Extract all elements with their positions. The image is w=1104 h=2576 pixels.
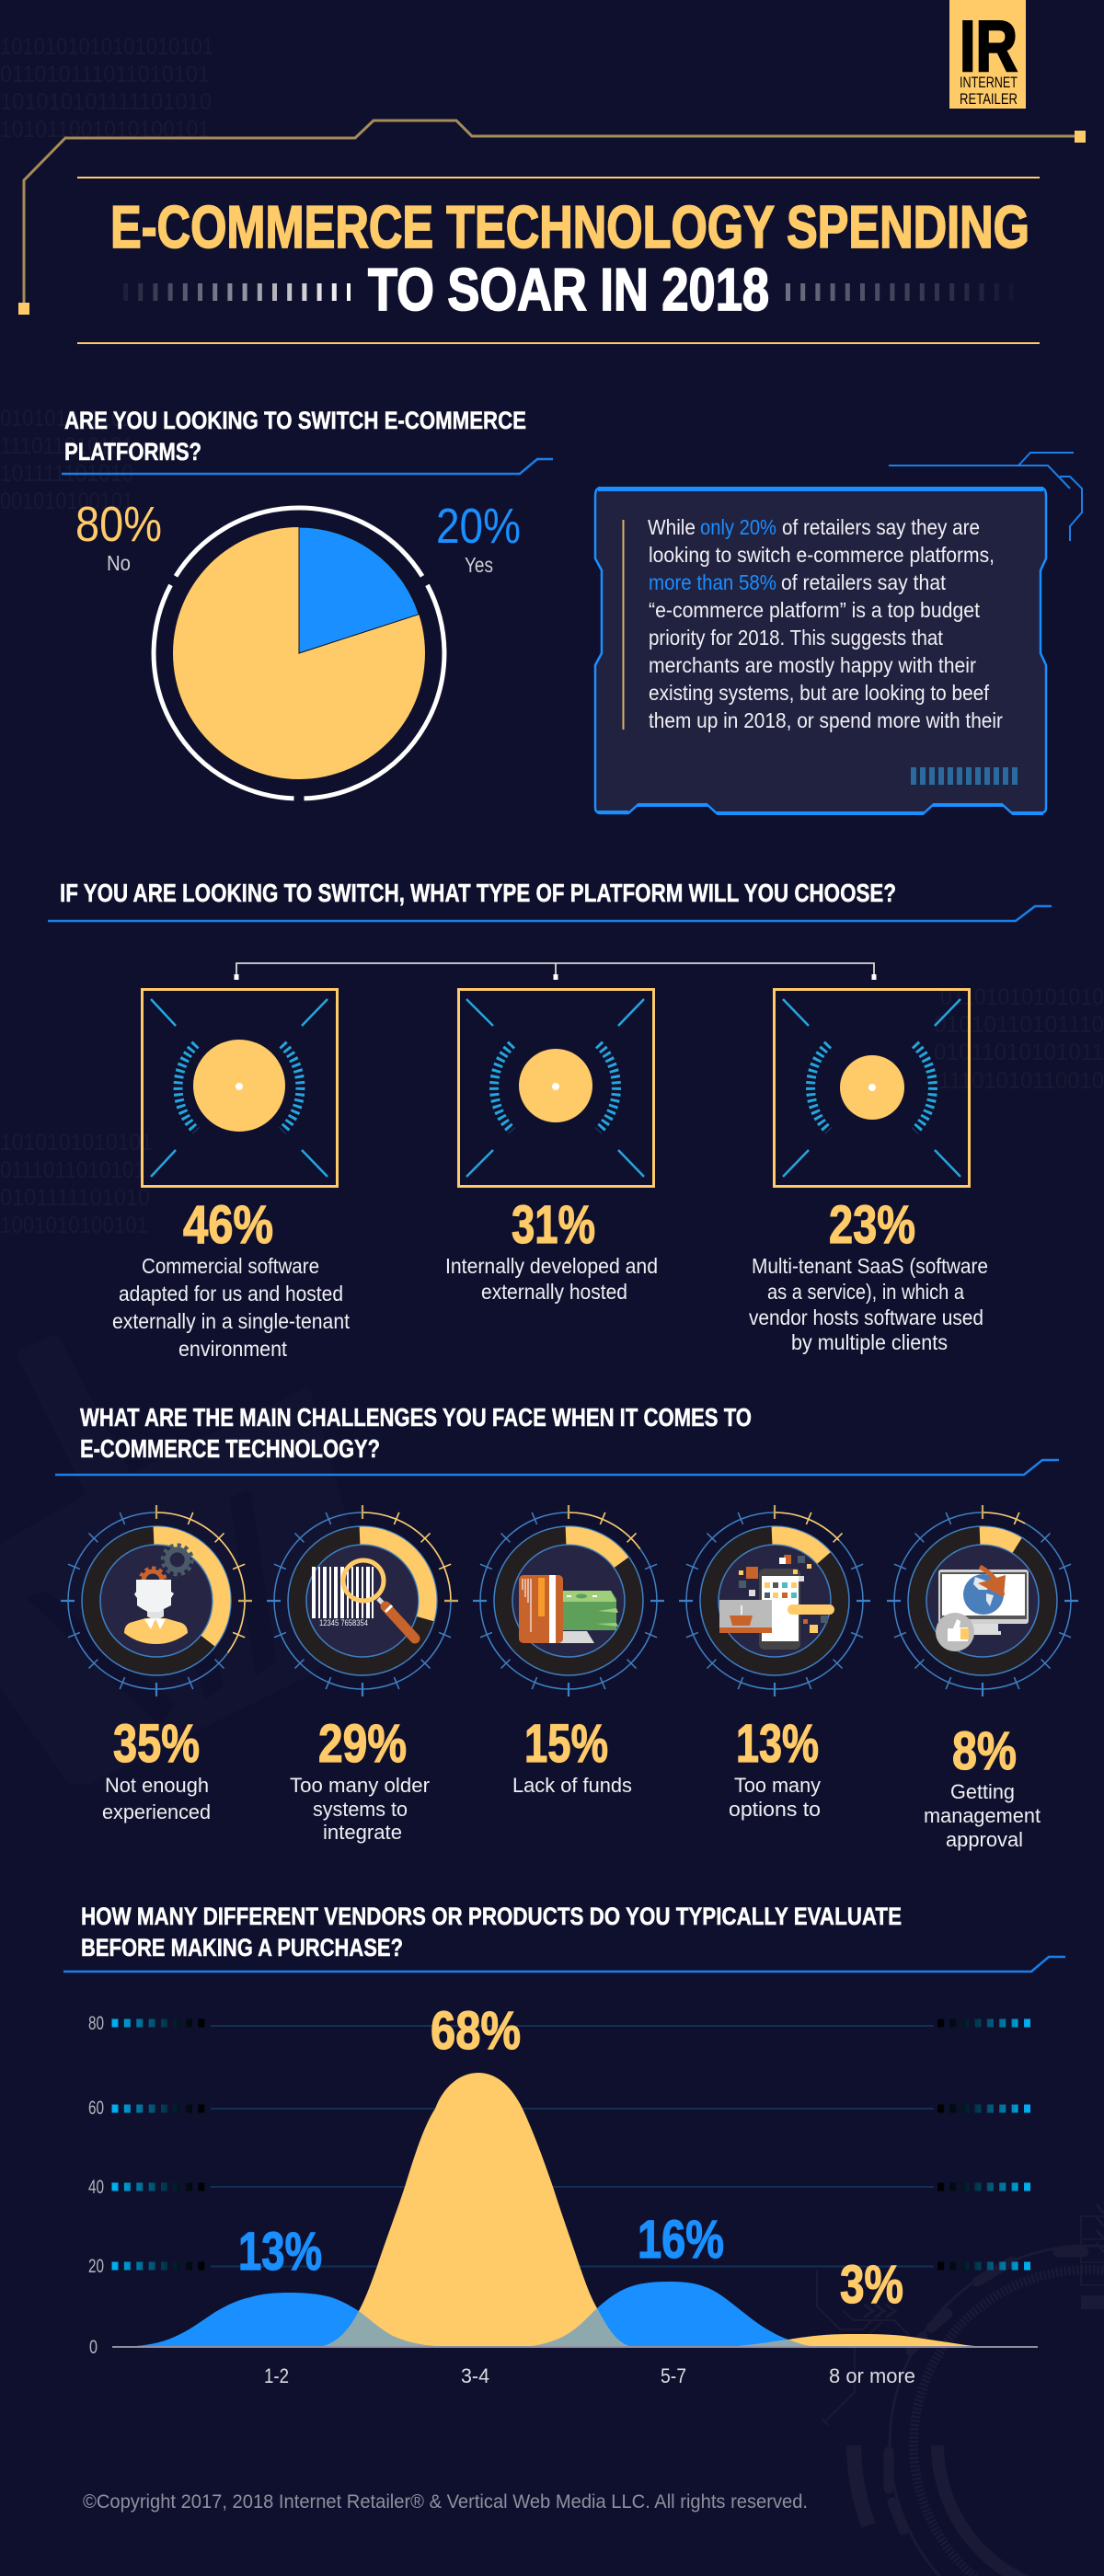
- heading: switch platforms: [62, 407, 553, 474]
- category labels: 8 or more: [829, 2364, 915, 2387]
- callout text: While: [648, 515, 696, 539]
- platform card: 31% internally developed: externally hosted: [481, 1280, 627, 1304]
- label: 20% Yes: [436, 499, 521, 577]
- heading: vendors evaluated: BEFORE MAKING A PURCHASE?: [81, 1934, 403, 1961]
- curve overlaps: [324, 2308, 810, 2346]
- heading: switch platforms: ARE YOU LOOKING TO SWITCH E-COMMERCE: [64, 407, 526, 434]
- curve: 3-4 vendors: [317, 2073, 635, 2347]
- heading: platform type: IF YOU ARE LOOKING TO SWITCH, WHAT TYPE OF PLATFORM WILL YOU CHOOSE?: [60, 879, 896, 907]
- challenge gauge: 13% too many options: 13%: [736, 1714, 819, 1774]
- challenge gauge: 15% lack of funds: Lack of funds: [512, 1774, 632, 1797]
- label: 80% No: No: [107, 551, 131, 575]
- platform card: 46% commercial software: Commercial software: [142, 1254, 319, 1278]
- curve: 5-7 vendors: [515, 2282, 821, 2347]
- title block: [77, 177, 1040, 344]
- callout text: “e-commerce platform” is a top budget: [649, 598, 981, 622]
- heading: switch platforms: PLATFORMS?: [64, 438, 201, 466]
- value labels: 68%: [431, 2001, 521, 2061]
- pie chart: switch platforms: [75, 497, 521, 799]
- copyright: ©Copyright 2017, 2018 Internet Retailer® & Vertical Web Media LLC. All rights reserved.: [83, 2491, 808, 2513]
- chart grid and axis: 80: [88, 2013, 104, 2034]
- icon: barcode and magnifier: 12345 7658354: [319, 1618, 368, 1627]
- background binary text: top left: [0, 34, 213, 143]
- platform card: 31% internally developed: [445, 990, 658, 1304]
- challenge gauge: 35% not enough experienced: [61, 1505, 252, 1823]
- callout text: looking to switch e-commerce platforms,: [649, 543, 995, 567]
- challenge gauge: 8% management approval: 8%: [952, 1721, 1017, 1781]
- platform card: 23% multi-tenant SaaS: [749, 990, 988, 1354]
- platform card: 23% multi-tenant SaaS: Multi-tenant SaaS (software: [752, 1254, 988, 1278]
- platform card: 46% commercial software: externally in a single-tenant: [112, 1309, 351, 1333]
- value labels: [238, 2001, 903, 2315]
- chart grid and axis: 40: [88, 2177, 104, 2198]
- title block: TO SOAR IN 2018: [368, 256, 769, 323]
- heading: challenges: [55, 1403, 1059, 1475]
- platform card: 46% commercial software: 46%: [183, 1195, 273, 1255]
- background binary text: section one: [0, 406, 133, 514]
- value labels: 16%: [638, 2210, 724, 2270]
- challenge gauge: 15% lack of funds: [473, 1505, 664, 1797]
- circuit line: header: [18, 121, 1086, 315]
- pie outer ring: [154, 508, 444, 799]
- chart grid and axis: 0: [89, 2337, 98, 2358]
- challenge gauge: 13% too many options: Too many: [734, 1774, 821, 1797]
- logo: Internet Retailer: RETAILER: [960, 90, 1018, 108]
- callout panel: [595, 487, 1046, 813]
- callout text: only 20%: [700, 515, 776, 539]
- platform card: 46% commercial software: [112, 990, 351, 1361]
- challenge gauge: 35% not enough experienced: experienced: [102, 1800, 211, 1823]
- challenge gauge: 29% older systems: integrate: [323, 1821, 402, 1844]
- connector bracket: [234, 963, 876, 980]
- background binary text: top left: 011010111011010101: [0, 62, 210, 87]
- platform card: 46% commercial software: environment: [178, 1337, 288, 1361]
- heading: platform type: [48, 879, 1052, 921]
- background binary text: top left: 1010101010101010101: [0, 34, 213, 60]
- curve: 1-2 vendors: [120, 2293, 444, 2347]
- category labels: 3-4: [461, 2364, 489, 2387]
- challenge gauge: 29% older systems: 29%: [318, 1714, 407, 1774]
- heading: challenges: E-COMMERCE TECHNOLOGY?: [80, 1434, 380, 1463]
- background binary text: section one: 101111101010: [0, 461, 133, 487]
- callout text: [648, 515, 1003, 732]
- challenge gauge: 15% lack of funds: 15%: [524, 1714, 608, 1774]
- icon: monitor with globe and thumbs up: [936, 1567, 1029, 1651]
- heading: vendors evaluated: HOW MANY DIFFERENT VENDORS OR PRODUCTS DO YOU TYPICALLY EVALUATE: [81, 1903, 902, 1930]
- label: 20% Yes: 20%: [436, 499, 521, 554]
- background binary text: top left: 101010101111101010: [0, 89, 212, 115]
- platform card: 23% multi-tenant SaaS: 23%: [829, 1195, 915, 1255]
- challenge gauge: 13% too many options: [679, 1505, 870, 1821]
- background binary text: section two left: 0101111101010: [0, 1185, 150, 1211]
- challenge gauge: 13% too many options: options to: [729, 1798, 821, 1821]
- pie slice: yes 20%: [299, 527, 419, 653]
- value labels: 3%: [840, 2255, 903, 2315]
- background watermark: circuit rings: [817, 2204, 1104, 2576]
- heading: vendors evaluated: [63, 1903, 1065, 1972]
- pie slice: no 80%: [173, 527, 425, 779]
- category labels: [264, 2364, 915, 2387]
- challenge gauge: 29% older systems: [267, 1505, 458, 1844]
- logo: Internet Retailer: IR: [960, 6, 1018, 86]
- callout text: of retailers say they are: [782, 515, 980, 539]
- challenge gauge: 35% not enough experienced: Not enough: [105, 1774, 209, 1797]
- callout text: of retailers say that: [781, 570, 947, 594]
- curve: 8 or more vendors: [727, 2334, 1007, 2347]
- challenge gauge: 29% older systems: systems to: [313, 1798, 408, 1821]
- platform card: 31% internally developed: 31%: [512, 1195, 595, 1255]
- challenge gauge: 35% not enough experienced: 35%: [113, 1714, 200, 1774]
- category labels: 5-7: [661, 2364, 686, 2387]
- logo: Internet Retailer: [949, 0, 1026, 109]
- platform card: 23% multi-tenant SaaS: as a service), in which a: [767, 1280, 964, 1304]
- heading: challenges: WHAT ARE THE MAIN CHALLENGES YOU FACE WHEN IT COMES TO: [80, 1403, 752, 1432]
- background binary text: section two right: 01010110101110: [934, 1012, 1104, 1038]
- chart grid and axis: [88, 2013, 1030, 2358]
- value labels: 13%: [238, 2222, 322, 2282]
- category labels: 1-2: [264, 2364, 289, 2387]
- logo: Internet Retailer: INTERNET: [960, 74, 1018, 91]
- label: 20% Yes: Yes: [465, 553, 493, 577]
- background binary text: section two left: 1010101010101: [0, 1130, 153, 1156]
- label: 80% No: [75, 497, 162, 575]
- icon: head with gears: [124, 1546, 191, 1644]
- icon: credit card and cash: [519, 1575, 618, 1643]
- platform card: 23% multi-tenant SaaS: vendor hosts software used: [749, 1305, 983, 1329]
- callout text: merchants are mostly happy with their: [649, 653, 976, 677]
- platform card: 46% commercial software: adapted for us and hosted: [119, 1282, 343, 1305]
- challenge gauge: 8% management approval: Getting: [950, 1780, 1015, 1803]
- background binary text: top left: 101011001010100101: [0, 117, 210, 143]
- background binary text: section two right: [934, 984, 1104, 1094]
- platform card: 23% multi-tenant SaaS: by multiple clients: [791, 1330, 948, 1354]
- challenge gauge: 8% management approval: management: [924, 1804, 1041, 1827]
- platform card: 31% internally developed: Internally developed and: [445, 1254, 658, 1278]
- background watermark: faint IR logo: [0, 1340, 371, 1779]
- challenge gauge: 8% management approval: approval: [946, 1828, 1023, 1851]
- background binary text: section one: 010101010101: [0, 406, 133, 431]
- circuit lines above callout: [889, 453, 1082, 541]
- chart grid and axis: 20: [88, 2256, 104, 2277]
- background binary text: section two left: 0111011010101: [0, 1157, 145, 1183]
- challenge gauge: 29% older systems: Too many older: [290, 1774, 430, 1797]
- chart grid and axis: 60: [88, 2098, 104, 2119]
- callout text: them up in 2018, or spend more with their: [649, 708, 1003, 732]
- icon: barcode and magnifier: [312, 1560, 415, 1639]
- background binary text: section one: 001010100101: [0, 489, 133, 514]
- callout text: priority for 2018. This suggests that: [649, 626, 944, 650]
- background binary text: section two left: 1001010100101: [0, 1213, 148, 1238]
- label: 80% No: 80%: [75, 497, 162, 552]
- callout text: more than 58%: [649, 570, 776, 594]
- challenge gauge: 8% management approval: [887, 1505, 1078, 1851]
- background binary text: section two left: [0, 1130, 153, 1238]
- background binary text: section one: 111011010101: [0, 433, 133, 459]
- icon: phone, basket and search: [719, 1555, 834, 1650]
- callout text: existing systems, but are looking to beef: [649, 681, 990, 705]
- area chart: vendors evaluated: [88, 2001, 1038, 2387]
